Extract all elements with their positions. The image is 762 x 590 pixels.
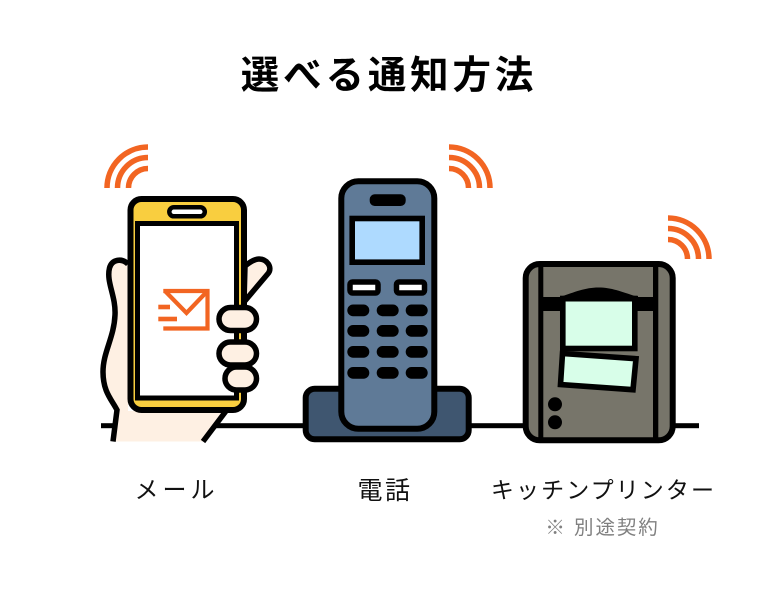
icon: signal waves right xyxy=(668,218,709,259)
finger 1 xyxy=(219,308,256,330)
icon: signal waves left xyxy=(107,147,148,188)
icon: hand thumb xyxy=(244,259,270,302)
keypad xyxy=(347,304,428,379)
phone screen xyxy=(138,224,236,398)
label: kitchen printer: キッチンプリンター xyxy=(491,477,716,503)
label: mail: メール xyxy=(134,477,218,504)
baseline shelf xyxy=(101,423,699,428)
phone body xyxy=(130,199,244,410)
finger 2 xyxy=(219,342,256,365)
note: separate contract: ※ 別途契約 xyxy=(545,517,660,539)
icon: cordless phone xyxy=(306,181,469,439)
icon: smartphone in hand xyxy=(103,199,270,442)
receipt paper upper xyxy=(563,298,635,348)
phone base xyxy=(306,389,469,439)
soft keys xyxy=(350,282,424,293)
title: 選べる通知方法 xyxy=(241,54,537,98)
printer buttons xyxy=(548,397,562,411)
icon: hand palm xyxy=(103,260,226,442)
printer side bars xyxy=(538,264,658,440)
icon: kitchen printer xyxy=(526,264,673,440)
receipt paper lower xyxy=(560,354,636,390)
handset xyxy=(341,181,434,429)
printer slot xyxy=(543,288,653,311)
label: phone: 電話 xyxy=(357,477,413,505)
display xyxy=(352,218,422,262)
earpiece xyxy=(370,194,406,206)
finger 3 xyxy=(225,367,256,390)
icon: signal waves middle xyxy=(449,147,490,188)
icon: mail xyxy=(158,291,208,328)
phone speaker xyxy=(169,207,205,216)
printer body xyxy=(526,264,673,440)
